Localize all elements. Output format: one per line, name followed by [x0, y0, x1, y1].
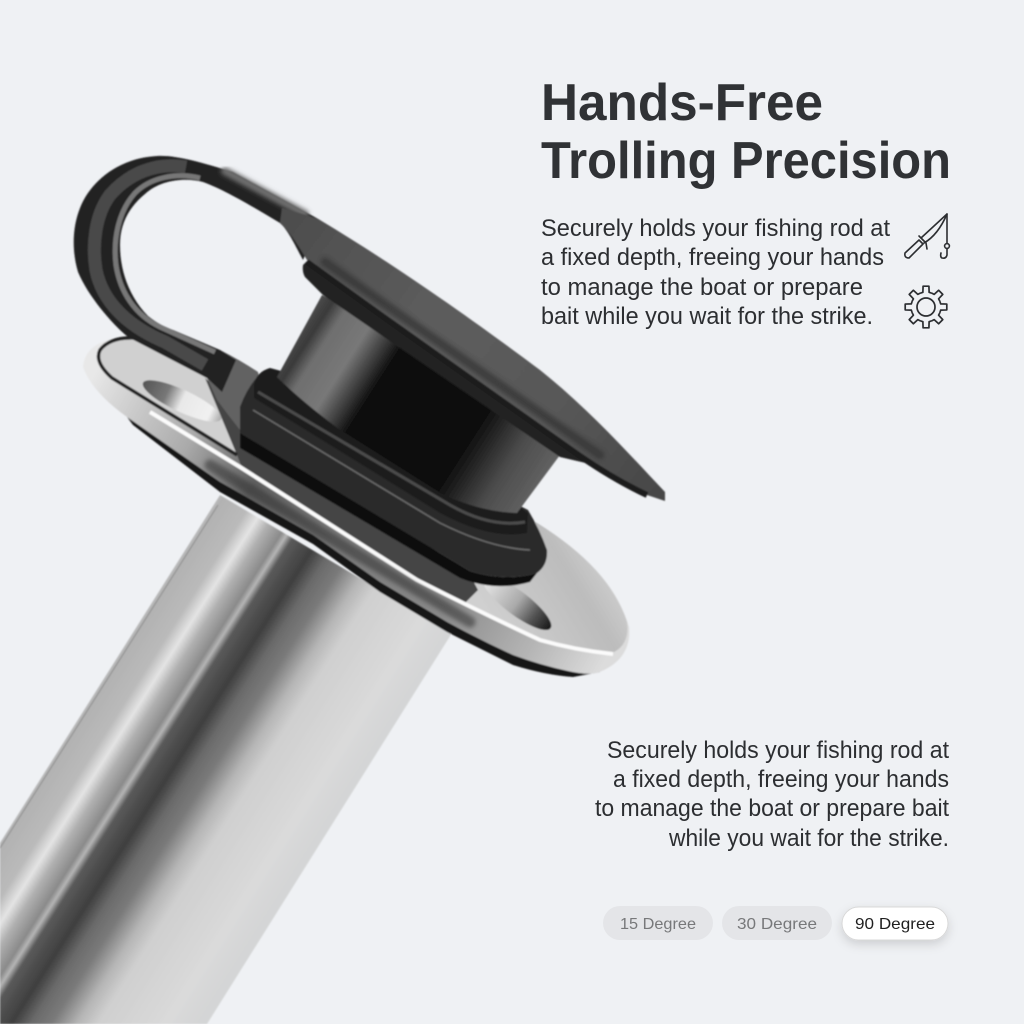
description top: bait while you wait for the strike.	[541, 303, 873, 330]
flange black underside	[127, 417, 600, 677]
black neck	[277, 295, 560, 513]
description top: a fixed depth, freeing your hands	[541, 244, 884, 271]
pill: 30 Degree: 30 Degree	[737, 916, 817, 933]
strap upper sheen	[225, 171, 305, 214]
icon: fishing rod	[905, 214, 949, 258]
inner ring highlight	[258, 392, 525, 523]
dark metal reflection beside gasket	[205, 378, 478, 603]
flange top face	[99, 339, 627, 653]
description top: to manage the boat or prepare	[541, 274, 863, 301]
strap	[74, 156, 320, 392]
flange face outline	[98, 338, 237, 455]
description bottom: to manage the boat or prepare bait	[595, 795, 949, 822]
description bottom: a fixed depth, freeing your hands	[613, 766, 949, 793]
description top: Securely holds your fishing rod at	[541, 215, 890, 242]
gasket thin lines	[253, 410, 530, 550]
title	[541, 74, 951, 190]
rim highlight	[150, 412, 613, 654]
cap lower edge	[307, 262, 647, 495]
pill: 30 Degree	[722, 906, 832, 940]
description top	[541, 215, 890, 330]
title: Trolling Precision	[541, 132, 951, 190]
gasket connecting tab	[128, 330, 262, 430]
strap light inner band	[115, 176, 215, 352]
stainless tube	[0, 495, 452, 1024]
pill: 15 Degree	[603, 906, 713, 940]
description bottom	[595, 737, 949, 852]
description bottom: Securely holds your fishing rod at	[607, 737, 949, 764]
strap grey band	[94, 166, 205, 365]
product photo: rod holder	[0, 156, 665, 1024]
title: Hands-Free	[541, 74, 823, 132]
rim dark band	[210, 465, 470, 622]
gasket metal shadow	[240, 433, 537, 586]
upper collar	[303, 258, 594, 464]
tube edge line	[0, 505, 218, 848]
gasket inner ring	[254, 368, 528, 534]
flange rim	[83, 338, 629, 674]
gasket outer ring	[240, 372, 547, 577]
description bottom: while you wait for the strike.	[668, 825, 949, 852]
pill: 90 Degree active	[842, 907, 948, 940]
pill: 90 Degree active: 90 Degree	[855, 916, 935, 933]
icon: gear	[905, 286, 947, 328]
pill: 15 Degree: 15 Degree	[620, 916, 696, 933]
strap and cap	[74, 156, 665, 501]
cap mottled edge	[325, 262, 600, 455]
cap disc	[280, 208, 665, 501]
left mounting hole	[138, 373, 226, 429]
right mounting hole	[476, 568, 558, 638]
